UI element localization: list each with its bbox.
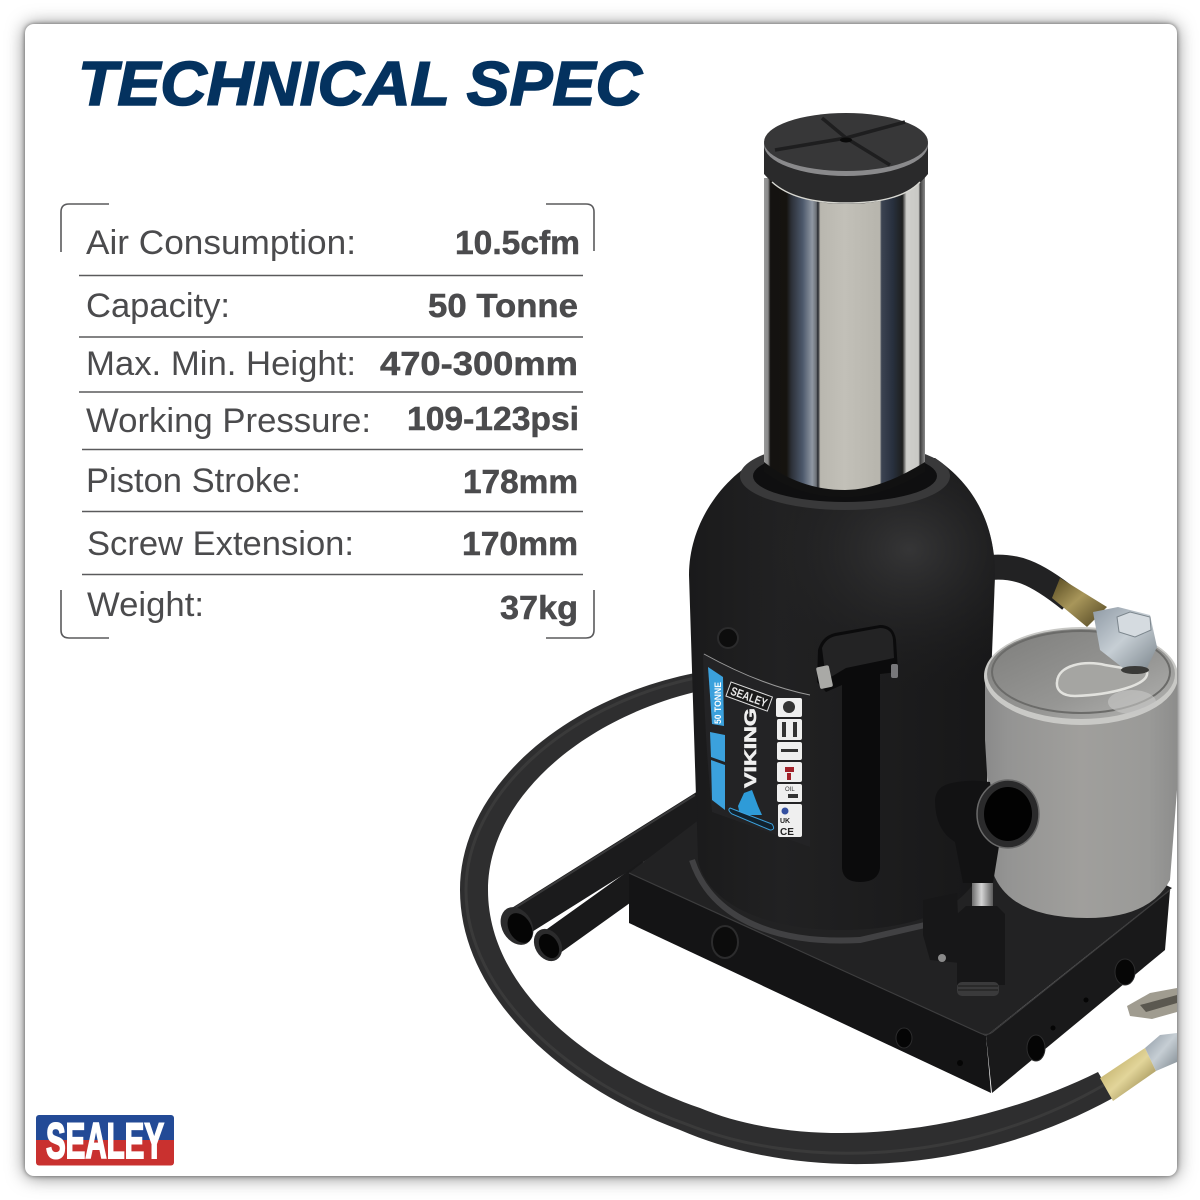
row: working pressure: [86, 400, 579, 440]
steel hose block with hex bolt: [1093, 607, 1157, 674]
pump socket bracket on body: [816, 625, 898, 882]
saddle cap: [764, 113, 928, 204]
lid oval plate: [1057, 663, 1147, 696]
product label: OIL: [785, 787, 795, 793]
neck collar: [740, 454, 950, 510]
hydraulic pump assembly: [923, 780, 1039, 996]
row: max min height: 470-300mm: [380, 345, 578, 382]
main air hose: [460, 673, 1113, 1164]
row: max min height: [86, 345, 578, 383]
row: screw extension: 170mm: [462, 525, 578, 562]
brand logo: SEALEY: [46, 1113, 164, 1169]
row: capacity: [86, 287, 578, 325]
reservoir can: [984, 627, 1178, 918]
product label: [703, 653, 810, 847]
pump side bracket: [923, 901, 958, 962]
row: air consumption: [86, 224, 580, 262]
knob on body: [718, 628, 738, 648]
pump ram rod: [972, 883, 993, 906]
row: capacity: Capacity:: [86, 287, 230, 325]
row: weight: 37kg: [500, 589, 578, 626]
row: piston stroke: Piston Stroke:: [86, 462, 301, 500]
small hose from body to reservoir: [985, 567, 1107, 627]
row: piston stroke: 178mm: [463, 463, 578, 500]
pump barrel: [957, 906, 1005, 985]
base plate bolts and holes: [712, 926, 1135, 1066]
bracket frame around specification table: [61, 204, 594, 638]
row: working pressure: 109-123psi: [407, 400, 579, 437]
label safety icons: [776, 698, 802, 837]
title: TECHNICAL SPEC: [78, 50, 643, 119]
row: working pressure: Working Pressure:: [86, 402, 371, 440]
product illustration: air hydraulic bottle jack: [460, 113, 1178, 1164]
cylinder body: [689, 458, 995, 930]
row: screw extension: [87, 525, 578, 563]
product label: UK: [780, 818, 790, 825]
brand logo: [36, 1113, 174, 1169]
product label: CE: [780, 827, 794, 838]
row: weight: Weight:: [87, 586, 204, 624]
row: air consumption: Air Consumption:: [86, 224, 356, 262]
air line brass fitting and trigger: [1100, 988, 1177, 1101]
label wordmark: VIKING: [741, 708, 760, 788]
handle tubes: [494, 795, 705, 966]
row: max min height: Max. Min. Height:: [86, 345, 356, 383]
label ship emblem: [738, 790, 762, 815]
pump socket: [977, 780, 1039, 848]
chrome ram: [764, 178, 925, 497]
product label: 50 TONNE: [713, 682, 723, 724]
steel base plate: [629, 828, 1172, 1093]
row: capacity: 50 Tonne: [428, 287, 578, 324]
row: screw extension: Screw Extension:: [87, 525, 354, 563]
row: piston stroke: [86, 462, 578, 500]
row: air consumption: 10.5cfm: [455, 224, 580, 261]
row: weight: [87, 586, 578, 626]
label brand box: SEALEY: [729, 684, 769, 710]
weld ring at body foot: [692, 860, 925, 941]
blue capacity strips: [708, 667, 725, 810]
